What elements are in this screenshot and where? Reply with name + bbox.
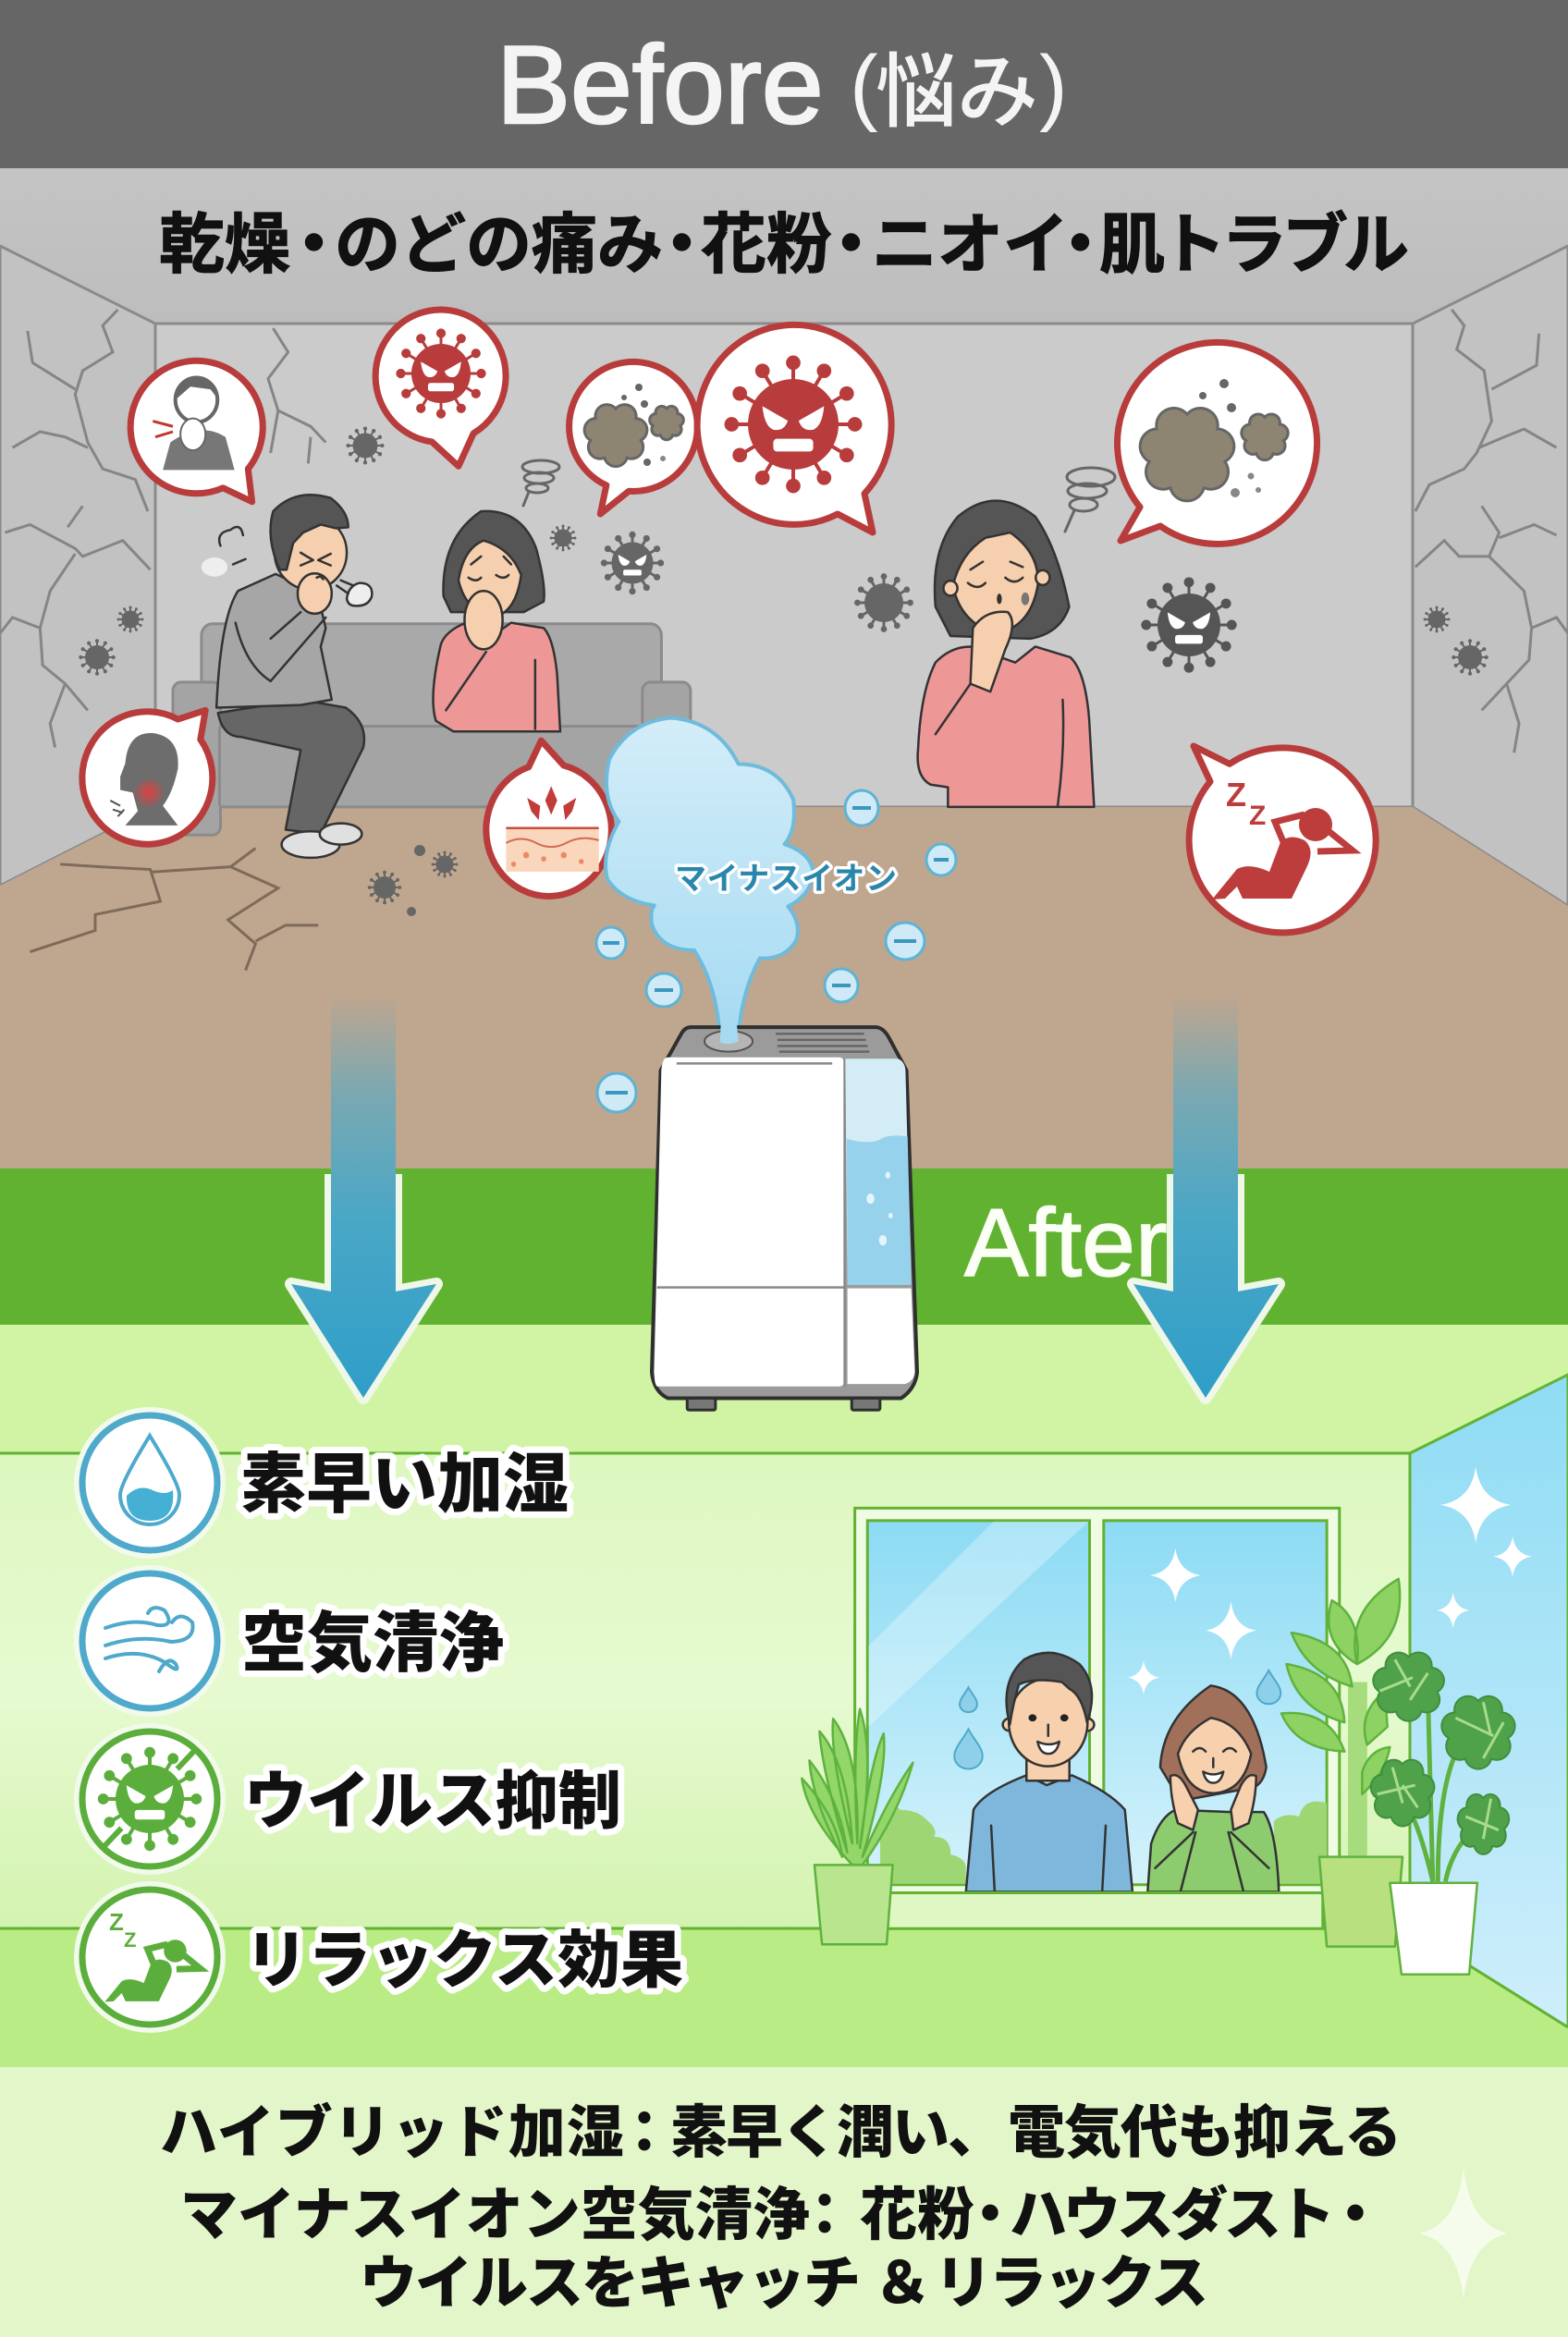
summary text: [160, 2086, 1401, 2319]
header bar: [0, 0, 1568, 168]
window scene: [802, 1467, 1532, 1975]
bubble: dust: [570, 361, 697, 514]
happy man: [966, 1653, 1133, 1891]
right wall: [1410, 1375, 1568, 2027]
right glass: [1104, 1521, 1327, 1885]
summary text: ＆: [874, 2236, 931, 2319]
summary text: ウイルスをキャッチ: [360, 2236, 859, 2319]
left wall: [0, 246, 155, 886]
figure: coughing man: [202, 495, 372, 858]
title: Before: 悩み: [876, 27, 1038, 144]
summary text: 花粉: [860, 2168, 974, 2251]
happy woman: [1147, 1685, 1279, 1891]
heading: complaints: のどの痛み: [335, 192, 663, 287]
icon: virus prohibited: [74, 1723, 226, 1875]
feature text: virus suppression: ウイルス抑制: [244, 1750, 621, 1841]
icon: relax: Z: [109, 1908, 124, 1936]
icons: grey viruses and dust: [79, 426, 1488, 916]
summary text: 電気代も抑える: [1008, 2086, 1401, 2169]
minus ions: [596, 790, 956, 1112]
plant: monstera: [1371, 1653, 1515, 1975]
left glass: [867, 1521, 1090, 1885]
icon: relax: Z: [124, 1928, 136, 1952]
icon: red virus small: [396, 328, 486, 419]
title: Before: ): [1039, 39, 1068, 133]
summary text: 素早く潤い、: [670, 2086, 1003, 2169]
summary text: リラックス: [935, 2236, 1206, 2319]
nozzle: [704, 1031, 753, 1052]
panel: before room: [0, 0, 1568, 1168]
icon: water drop: [74, 1407, 226, 1559]
water tank: [845, 1058, 912, 1285]
window sill: [888, 1892, 1323, 1928]
heading: complaints: ・: [1047, 192, 1113, 287]
summary text: ハイブリッド加湿: [160, 2086, 625, 2169]
feature text: relaxation: リラックス効果: [245, 1909, 683, 2001]
bubble: big dust: [1118, 342, 1317, 544]
panel: after room: [0, 1325, 1568, 2067]
plant: left: [802, 1709, 913, 1944]
title: Before: Before: [496, 23, 824, 147]
summary text: マイナスイオン空気清浄: [180, 2168, 810, 2251]
floor: [0, 807, 1568, 1168]
bottom panel: [0, 2067, 1568, 2337]
arrow: right: [1133, 994, 1279, 1398]
figure: woman on sofa: [433, 511, 560, 731]
bushes: [880, 1802, 1327, 1884]
feet: [687, 1398, 716, 1410]
icons: dizzy swirls: [522, 460, 1115, 532]
arrow: left: [291, 994, 436, 1398]
sparkles: [1127, 1467, 1532, 1695]
label: minus ion: マイナスイオン: [675, 853, 897, 899]
feature text: fast humidification: 素早い加湿: [240, 1432, 569, 1526]
sparkle: [1419, 2167, 1508, 2300]
heading: complaints: ニオイ: [872, 192, 1069, 287]
label: After: After: [964, 1190, 1168, 1297]
icon: relax: [74, 1881, 226, 2033]
bubble: cough icon: [130, 361, 263, 502]
summary text: ：: [796, 2168, 853, 2251]
window frame: [855, 1508, 1340, 1893]
bubble: poor sleep: Z: [1226, 776, 1246, 814]
heading: complaints: ・: [281, 192, 347, 287]
figure: woman standing: [918, 501, 1094, 807]
summary text: ：: [616, 2086, 673, 2169]
back wall: [155, 324, 1413, 807]
right wall: [1413, 246, 1568, 906]
feature text: air purification: 空気清浄: [241, 1591, 504, 1685]
vents: [776, 1034, 869, 1052]
wall and floor cracks: [0, 310, 1568, 971]
bubble: poor sleep: Z: [1249, 801, 1266, 831]
heading: complaints: 肌トラブル: [1099, 192, 1407, 287]
heading: complaints: 乾燥: [159, 192, 290, 287]
heading: complaints: ・: [649, 192, 715, 287]
bubble: poor sleep: [1189, 746, 1376, 933]
summary text: ・: [1327, 2168, 1384, 2251]
sofa: [173, 624, 691, 835]
summary text: ハウスダスト: [1010, 2168, 1331, 2251]
heading: complaints: 花粉: [701, 192, 832, 287]
feature list: [74, 1407, 683, 2033]
bubble: skin trouble: [486, 740, 611, 896]
bubble: red virus: [375, 310, 506, 466]
summary text: ・: [962, 2168, 1019, 2251]
humidifier steam cloud: [606, 718, 814, 1040]
icon: wind: [74, 1565, 226, 1717]
after band: [0, 1168, 1568, 1325]
front panel: [655, 1058, 845, 1387]
heading: complaints: ・: [818, 192, 884, 287]
humidifier: [652, 1023, 917, 1410]
bubble: big red virus: [697, 324, 891, 532]
bubble: throat: [82, 710, 213, 844]
plant: tall right: [1281, 1579, 1403, 1947]
water drops: [954, 1670, 1280, 1768]
title: Before: (: [850, 39, 878, 133]
floor: [0, 1928, 1568, 2067]
body: [652, 1027, 917, 1398]
title: Before: [496, 23, 1068, 147]
